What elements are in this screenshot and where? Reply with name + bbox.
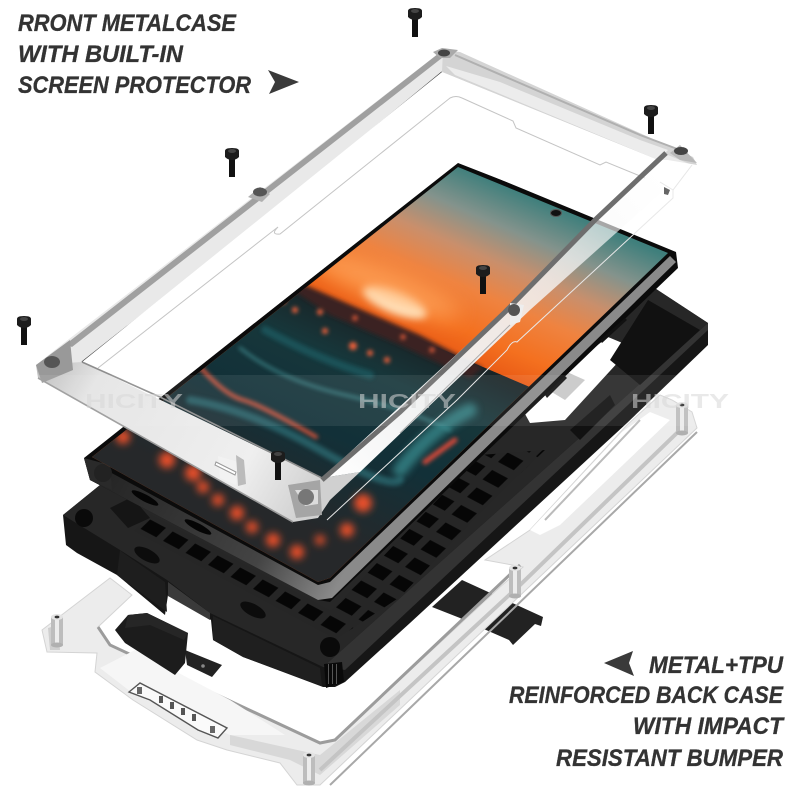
case silhouette and wall [63, 285, 708, 687]
corner ribs [324, 662, 344, 688]
recess [168, 582, 210, 620]
wave highlights [190, 330, 470, 482]
icon: frame pin right [676, 402, 688, 436]
port openings [132, 543, 162, 567]
camera punch hole [550, 210, 562, 216]
glass interior white panel corner [82, 72, 658, 397]
back metal frame [42, 395, 697, 785]
SIM slot pegs strip [129, 683, 227, 738]
frame top-right arm [442, 50, 697, 165]
bottom corner screw hole [288, 480, 322, 518]
top mid screw hole [248, 187, 270, 202]
heading: front metal case: WITH BUILT-IN [18, 41, 184, 68]
icon: frame pin left [51, 614, 63, 648]
black TPU back case [63, 285, 708, 688]
small tab on glass [664, 187, 670, 195]
frame top-left arm [36, 50, 452, 380]
frame right arm with white band [322, 155, 692, 478]
heading: back case: WITH IMPACT [633, 713, 785, 740]
arrow: points to front case [268, 70, 299, 94]
heading: front metal case [18, 10, 252, 99]
front metal frame with built-in screen protector [36, 48, 697, 522]
heading: front metal case: SCREEN PROTECTOR [18, 72, 252, 99]
black clip button [115, 613, 222, 677]
heading: back case: METAL+TPU [649, 652, 784, 679]
screw top centre [408, 8, 422, 37]
watermark: HICITY: HICITY [358, 391, 457, 413]
frame bottom-left arm [36, 362, 360, 522]
watermark: HICITY [85, 391, 730, 413]
slider notch [215, 455, 246, 486]
watermark: HICITY: HICITY [85, 391, 184, 413]
case top face [63, 285, 708, 667]
left corner screw hole [36, 340, 73, 383]
SIM tray [432, 580, 543, 645]
heading: back case [509, 652, 785, 772]
screws [17, 8, 658, 480]
screw far left [17, 316, 31, 345]
screw upper left [225, 148, 239, 177]
arrow: points to back case [604, 651, 634, 676]
heading: back case: RESISTANT BUMPER [556, 745, 784, 772]
corner mount holes [75, 509, 93, 527]
watermark: HICITY: HICITY [631, 391, 730, 413]
honeycomb lattice row [134, 514, 352, 640]
camera cutout [520, 337, 632, 423]
phone body [84, 163, 678, 602]
honeycomb lattice right [330, 450, 545, 640]
bokeh sea lights [280, 298, 434, 363]
top corner screw hole [433, 48, 458, 58]
right wall shapes [610, 300, 700, 385]
side mid screw hole [508, 303, 524, 325]
phone screen with sunset [92, 167, 668, 582]
glass outline right [327, 182, 673, 520]
heading: front metal case: RRONT METALCASE [18, 10, 237, 37]
right corner screw hole [670, 145, 697, 163]
case bottom wall highlight [323, 323, 708, 670]
icon: frame pin bottom [303, 752, 315, 786]
watermark band [0, 375, 800, 426]
icon: frame pin middle [509, 565, 521, 598]
screw bottom [271, 451, 285, 480]
screw on screen [476, 265, 490, 294]
screw upper right [644, 105, 658, 134]
glass outline top [98, 96, 645, 368]
